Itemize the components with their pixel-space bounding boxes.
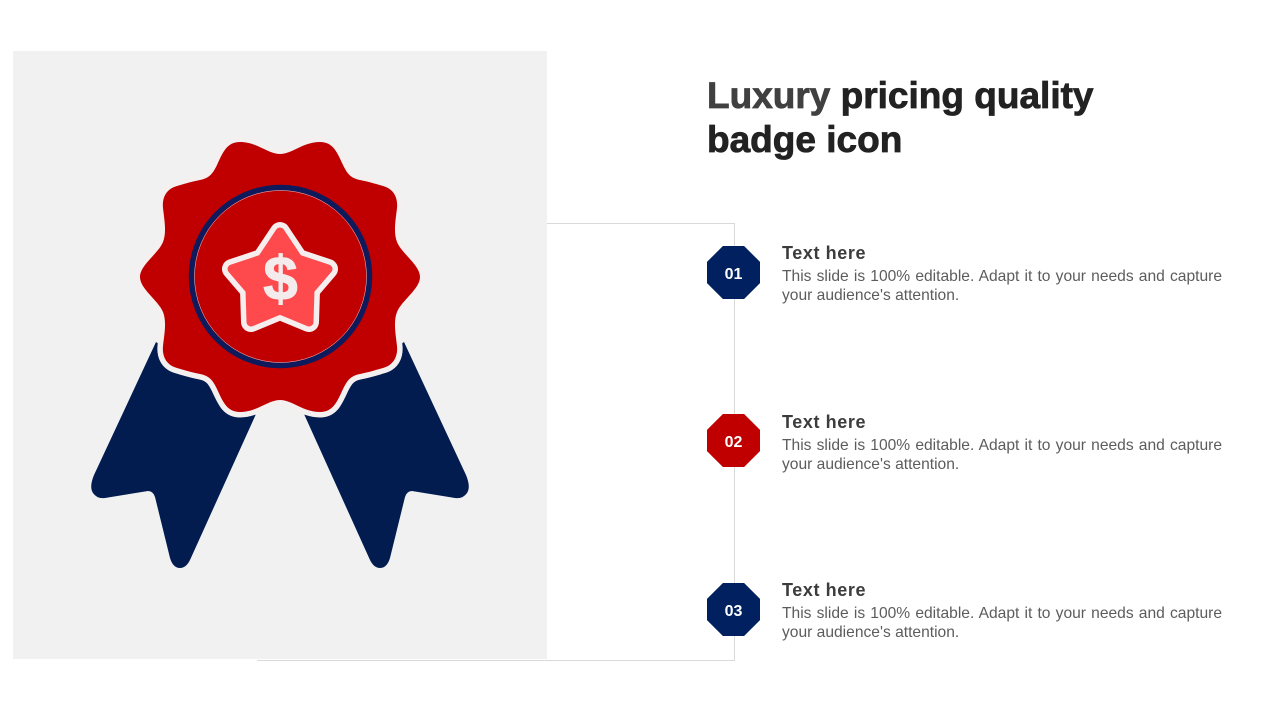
text block 03: your audience's attention. — [782, 624, 959, 641]
panel: badge background — [13, 51, 547, 659]
ring — [192, 188, 370, 366]
badge 01: 01 — [725, 266, 742, 283]
badge 01 — [707, 246, 760, 299]
left ribbon — [91, 342, 256, 568]
right ribbon — [304, 342, 469, 568]
text block 02: Text here — [782, 412, 866, 432]
text block 01: Text here — [782, 243, 866, 263]
text block 01: This slide is 100% editable. Adapt it to your needs and capture — [782, 268, 1222, 285]
star — [232, 232, 328, 322]
title: Luxury pricing quality — [707, 75, 1094, 116]
badge 02: 02 — [725, 434, 742, 451]
text block 02: your audience's attention. — [782, 456, 959, 473]
badge 02 — [707, 414, 760, 467]
text block 03: Text here — [782, 580, 866, 600]
text block 01 — [782, 243, 1222, 304]
badge 03 — [707, 583, 760, 636]
badge 03: 03 — [725, 603, 742, 620]
text block 03 — [782, 580, 1222, 641]
title: badge icon — [707, 119, 902, 160]
text block 02 — [782, 412, 1222, 473]
text block 03: This slide is 100% editable. Adapt it to your needs and capture — [782, 605, 1222, 622]
title — [707, 75, 1094, 160]
text block 01: your audience's attention. — [782, 287, 959, 304]
rosette — [140, 142, 420, 412]
dollar sign: $ — [263, 245, 298, 314]
text block 02: This slide is 100% editable. Adapt it to your needs and capture — [782, 437, 1222, 454]
icon: quality badge — [91, 142, 469, 568]
